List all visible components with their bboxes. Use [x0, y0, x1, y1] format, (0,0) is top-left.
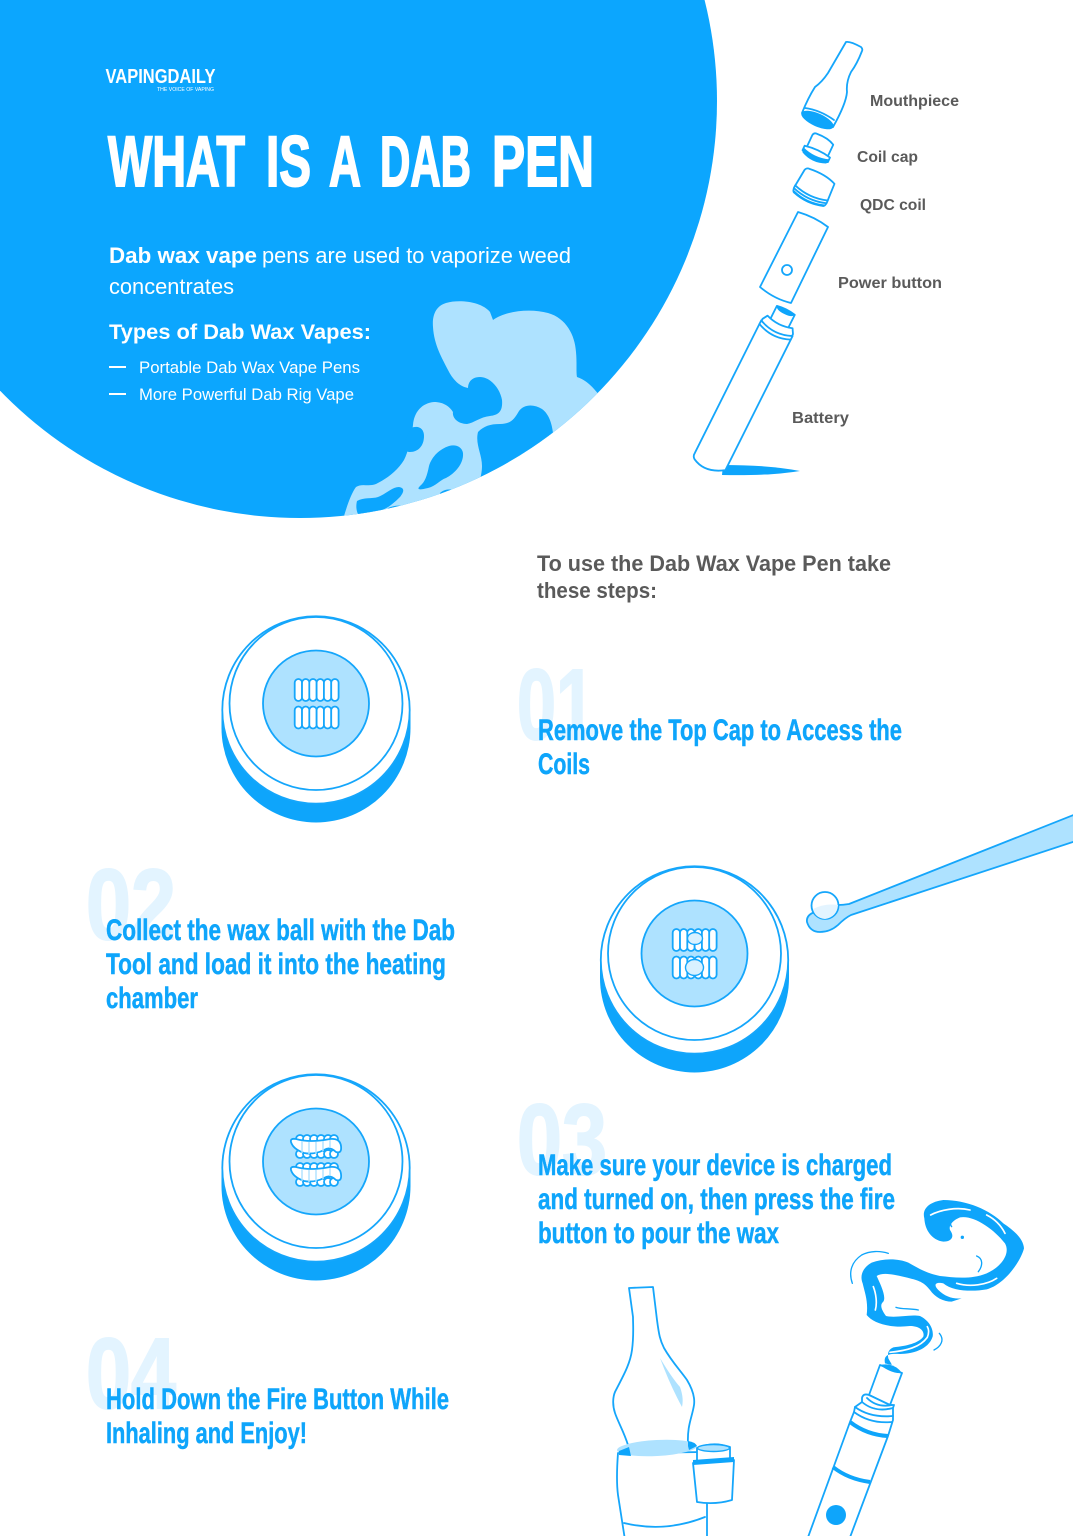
step 3 heading [538, 1149, 895, 1250]
bottle highlight [660, 1358, 683, 1407]
steps intro text: these steps: [537, 578, 657, 603]
number 03: 03 [517, 1084, 607, 1196]
logo: VapingDaily: VAPINGDAILY [106, 66, 216, 88]
power button body part [760, 212, 828, 303]
step 3 heading: and turned on, then press the fire [538, 1183, 895, 1216]
step 4 text [86, 1318, 449, 1450]
step 2 heading: chamber [106, 982, 198, 1015]
smoke cloud illustration [344, 301, 598, 516]
label: power button: Power button [838, 275, 942, 292]
step 1 text [517, 649, 902, 781]
title: IS [266, 123, 311, 202]
bottle rim [617, 1438, 697, 1458]
title: PEN [492, 123, 594, 202]
blue circle background [0, 0, 717, 518]
pen body [807, 1364, 902, 1536]
list item 2: More Powerful Dab Rig Vape [139, 385, 354, 404]
main smoke ribbon [861, 1200, 1024, 1365]
number 02: 02 [86, 849, 176, 961]
wax cap [693, 1444, 734, 1503]
labels [792, 93, 959, 427]
coil cap part [800, 131, 837, 167]
step 1 heading: Coils [538, 748, 590, 781]
intro text block: Dab wax vape [109, 243, 257, 268]
title: A [329, 123, 361, 202]
step 4 heading: Inhaling and Enjoy! [106, 1417, 307, 1450]
battery body [691, 301, 802, 477]
header circle panel [0, 0, 717, 530]
step 4 heading [106, 1383, 449, 1450]
bottle glass [613, 1287, 694, 1445]
mouthpiece part [799, 42, 862, 133]
intro text block: concentrates [109, 274, 234, 299]
title [108, 123, 594, 202]
coil illustration with wax: step 2 [600, 866, 789, 1072]
step 3 text [517, 1084, 895, 1250]
QDC coil part [791, 166, 837, 209]
number 04: 04 [86, 1318, 176, 1430]
step 1 heading [538, 714, 902, 781]
steps intro text [537, 551, 891, 603]
step 2 text [86, 849, 455, 1015]
step 4 heading: Hold Down the Fire Button While [106, 1383, 449, 1416]
vape pen with smoke [807, 1200, 1024, 1536]
label: QDC coil: QDC coil [860, 197, 926, 214]
label: coil cap: Coil cap [857, 149, 918, 166]
types of dab wax vapes list [109, 321, 371, 404]
dab tool with wax ball [807, 814, 1073, 932]
list heading: Types of Dab Wax Vapes: [109, 321, 371, 344]
step 3 heading: Make sure your device is charged [538, 1149, 892, 1182]
step 2 heading: Collect the wax ball with the Dab [106, 914, 455, 947]
smoke plume [851, 1200, 1024, 1365]
coil illustration with melted wax: step 3 [222, 1074, 410, 1280]
smoke wisps [851, 1219, 982, 1350]
battery shadow [722, 465, 800, 475]
list item 1: Portable Dab Wax Vape Pens [139, 358, 360, 377]
smoke highlights [873, 1209, 1005, 1352]
logo: VapingDaily: THE VOICE OF VAPING [157, 87, 214, 93]
intro text block: pens are used to vaporize weed [262, 243, 571, 268]
intro text block [109, 243, 571, 299]
exploded dab pen diagram [691, 42, 959, 477]
step 1 heading: Remove the Top Cap to Access the [538, 714, 902, 747]
battery part [691, 301, 802, 477]
coil illustration: step 1 [222, 616, 410, 822]
smoke speck [961, 1236, 964, 1239]
number 01: 01 [517, 649, 595, 761]
title: WHAT [108, 123, 245, 202]
label: battery: Battery [792, 410, 849, 427]
logo: VapingDaily [106, 66, 216, 93]
title: DAB [380, 123, 471, 202]
step 2 heading [106, 914, 455, 1015]
steps intro text: To use the Dab Wax Vape Pen take [537, 551, 891, 576]
label: mouthpiece: Mouthpiece [870, 93, 959, 110]
dab rig bottle with cap [613, 1287, 734, 1536]
base [617, 1452, 707, 1536]
step 3 heading: button to pour the wax [538, 1217, 779, 1250]
step 2 heading: Tool and load it into the heating [106, 948, 446, 981]
